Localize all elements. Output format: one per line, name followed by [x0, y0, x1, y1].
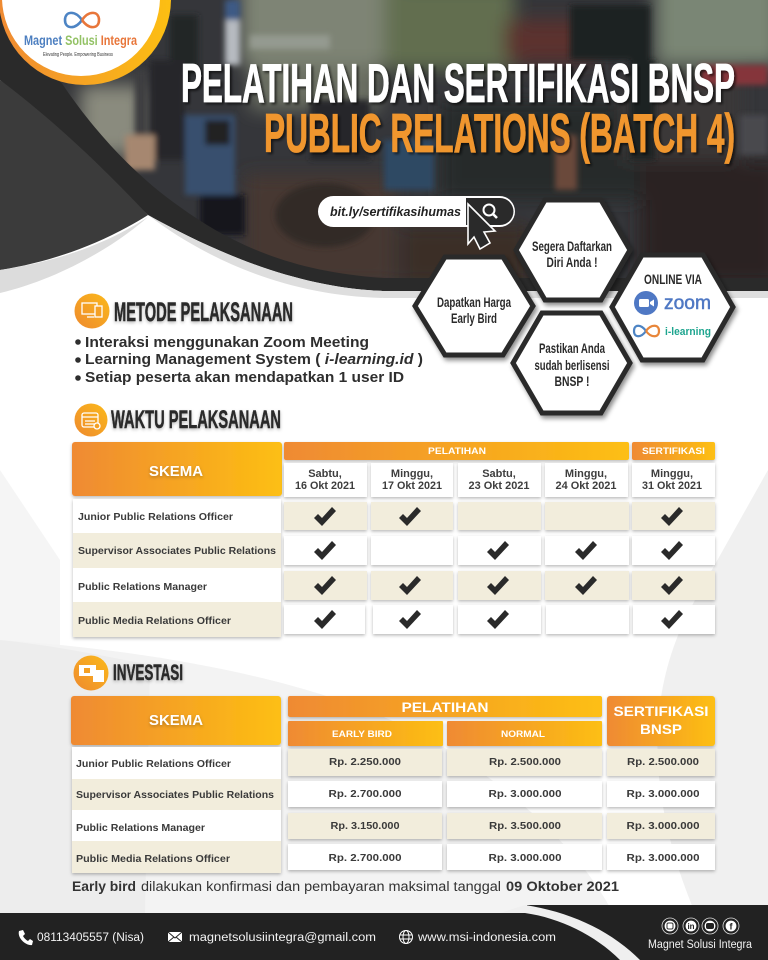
row: supervisor	[284, 536, 715, 565]
contact: phone	[19, 930, 144, 945]
hexagon: segera daftarkan: Diri Anda !	[546, 254, 598, 270]
scheme names: Supervisor Associates Public Relations	[78, 545, 276, 557]
row: supervisor prices: Rp. 3.000.000	[488, 788, 562, 800]
brand name: Magnet Solusi Integra	[648, 939, 753, 951]
row: supervisor prices: Rp. 3.000.000	[626, 788, 700, 800]
header: skema	[71, 696, 281, 745]
metode list	[75, 334, 423, 386]
heading: waktu pelaksanaan	[74, 404, 281, 436]
date headers: Minggu,	[565, 468, 607, 480]
hexagon: harga early bird: Early Bird	[451, 310, 497, 326]
row: junior prices	[288, 749, 715, 776]
pricing table	[71, 696, 715, 873]
header: skema: SKEMA	[149, 463, 203, 480]
icon: cursor	[468, 204, 495, 249]
scheme names: Junior Public Relations Officer	[78, 511, 233, 523]
search bar link: bit.ly/sertifikasihumas	[330, 205, 461, 219]
early bird note: dilakukan konfirmasi dan pembayaran maksimal tanggal	[141, 879, 501, 894]
scheme names: Public Relations Manager	[76, 822, 205, 834]
row: junior prices: Rp. 2.250.000	[329, 756, 401, 768]
date headers: Minggu,	[651, 468, 693, 480]
contact: email: magnetsolusiintegra@gmail.com	[189, 932, 376, 944]
row: junior	[284, 502, 715, 530]
hexagon: berlisensi BNSP: BNSP !	[554, 373, 590, 389]
date headers: 17 Okt 2021	[382, 480, 442, 492]
title	[181, 52, 735, 164]
scheme names: Public Relations Manager	[78, 581, 207, 593]
scheme names	[73, 499, 281, 637]
row: junior prices: Rp. 2.500.000	[489, 756, 561, 768]
early bird note: Early bird	[72, 879, 136, 894]
row: media	[284, 605, 715, 634]
scheme names	[72, 747, 281, 873]
social icons: f	[730, 922, 734, 932]
contact: website: www.msi-indonesia.com	[417, 932, 556, 944]
social icons	[662, 918, 739, 934]
date headers: 24 Okt 2021	[556, 480, 616, 492]
schedule table	[72, 442, 715, 637]
date headers: Sabtu,	[308, 468, 342, 480]
logo badge: Magnet Solusi Integra	[24, 32, 137, 48]
hexagon: online via zoom and i-learning: ONLINE VIA	[644, 271, 702, 287]
hexagon: berlisensi BNSP	[513, 313, 630, 413]
icon: devices	[82, 303, 102, 317]
row: manager prices	[288, 813, 715, 839]
metode list: Setiap peserta akan mendapatkan 1 user ID	[85, 369, 404, 386]
header: skema: SKEMA	[149, 712, 203, 729]
header: skema	[72, 442, 282, 496]
hexagon: segera daftarkan	[516, 200, 630, 300]
row: media prices: Rp. 3.000.000	[488, 852, 562, 864]
header: normal: NORMAL	[501, 729, 545, 740]
hexagon: berlisensi BNSP: Pastikan Anda	[539, 340, 605, 356]
scheme names: Public Media Relations Officer	[76, 853, 230, 865]
row: manager prices: Rp. 3.500.000	[489, 820, 561, 832]
heading: waktu pelaksanaan: WAKTU PELAKSANAAN	[111, 406, 281, 434]
hexagon: segera daftarkan: Segera Daftarkan	[532, 238, 612, 254]
date headers	[284, 463, 715, 497]
icon: magnifier	[484, 204, 497, 218]
header: early bird: EARLY BIRD	[332, 729, 392, 740]
icon: calendar	[82, 413, 100, 429]
early bird note: 09 Oktober 2021	[506, 879, 620, 894]
heading: investasi: INVESTASI	[113, 660, 183, 685]
date headers: Minggu,	[391, 468, 433, 480]
heading: metode pelaksanaan: METODE PELAKSANAAN	[114, 297, 293, 327]
hexagon: berlisensi BNSP: sudah berlisensi	[534, 357, 610, 373]
contact: phone: 08113405557 (Nisa)	[37, 932, 144, 944]
early bird note	[72, 879, 620, 894]
icon: zoom: zoom	[664, 293, 711, 314]
header: pelatihan: PELATIHAN	[402, 700, 488, 715]
date headers: Sabtu,	[482, 468, 516, 480]
header: pelatihan: PELATIHAN	[428, 446, 486, 457]
footer bar	[0, 905, 768, 960]
header: early bird	[288, 721, 443, 746]
row: manager prices: Rp. 3.150.000	[330, 820, 400, 832]
icon: i-learning: i-learning	[665, 326, 711, 338]
date headers: 16 Okt 2021	[295, 480, 355, 492]
search bar link	[318, 196, 515, 249]
date headers: 31 Okt 2021	[642, 480, 702, 492]
row: manager	[284, 571, 715, 600]
icon: infinity logo	[65, 13, 99, 27]
row: junior prices: Rp. 2.500.000	[627, 756, 699, 768]
header: normal	[447, 721, 602, 746]
hexagon: harga early bird: Dapatkan Harga	[437, 294, 511, 310]
row: media prices: Rp. 3.000.000	[626, 852, 700, 864]
scheme names: Junior Public Relations Officer	[76, 758, 231, 770]
row: manager prices: Rp. 3.000.000	[626, 820, 700, 832]
header: sertifikasi: SERTIFIKASI	[642, 446, 705, 457]
row: media prices	[288, 844, 715, 870]
hexagon: online via zoom and i-learning	[612, 255, 733, 360]
header: sertifikasi bnsp: BNSP	[640, 721, 682, 737]
social icons: in	[687, 922, 695, 931]
row: supervisor prices	[288, 781, 715, 807]
hexagon: harga early bird	[415, 257, 533, 355]
header: pelatihan	[284, 442, 629, 460]
curved dark band	[0, 0, 768, 298]
logo badge: Elevating People. Empowering Business	[43, 52, 113, 58]
header: pelatihan	[288, 696, 602, 717]
scheme names: Public Media Relations Officer	[78, 615, 231, 627]
header: sertifikasi bnsp	[607, 696, 715, 746]
header: sertifikasi bnsp: SERTIFIKASI	[614, 703, 708, 719]
header: sertifikasi	[632, 442, 715, 460]
row: media prices: Rp. 2.700.000	[328, 852, 402, 864]
scheme names: Supervisor Associates Public Relations	[76, 789, 274, 801]
hero photo: press cameras	[60, 0, 768, 278]
date headers: 23 Okt 2021	[468, 480, 530, 492]
metode list: Interaksi menggunakan Zoom Meeting	[85, 334, 369, 351]
heading: investasi	[74, 656, 183, 690]
row: supervisor prices: Rp. 2.700.000	[328, 788, 402, 800]
icon: money	[79, 665, 104, 682]
metode list: Learning Management System ( i-learning.id )	[85, 351, 423, 368]
heading: metode pelaksanaan	[74, 294, 293, 328]
logo badge	[0, 0, 171, 85]
